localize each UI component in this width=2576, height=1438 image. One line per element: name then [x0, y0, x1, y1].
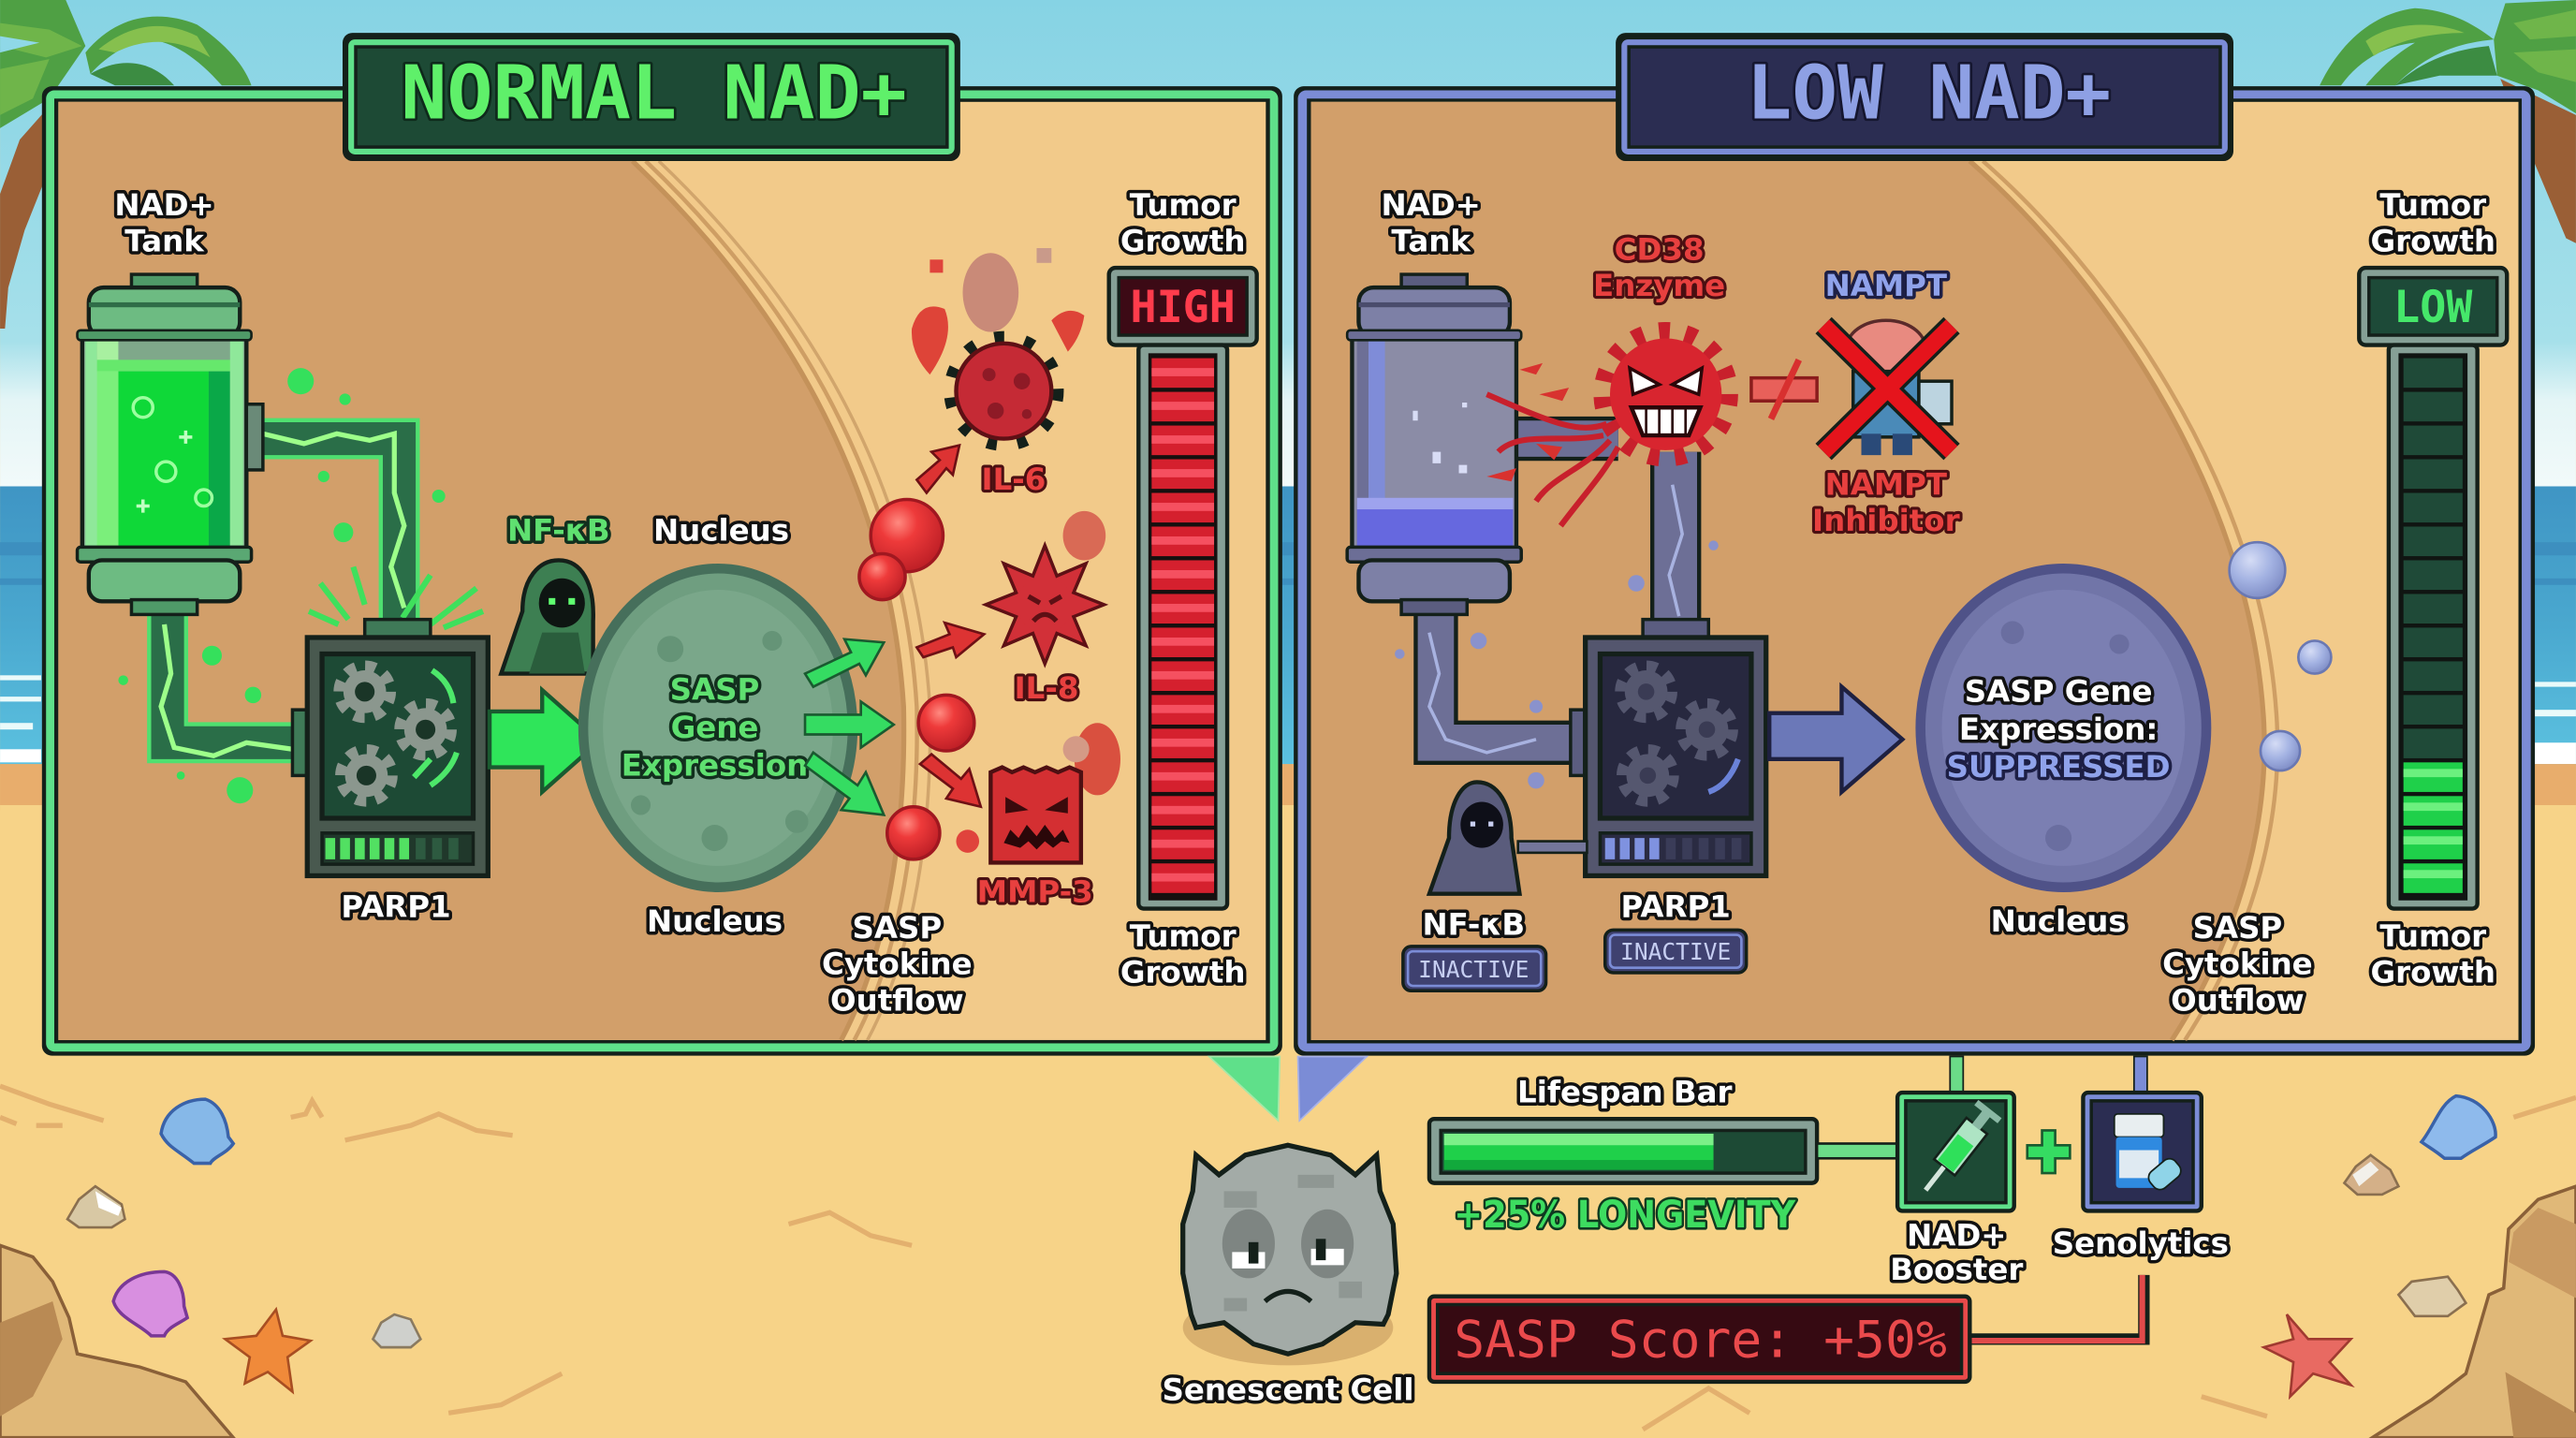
arrow: PARP1 to nucleus: [490, 690, 600, 792]
text: SASP gene expression: Gene: [671, 710, 758, 745]
arrow: to MMP-3: [920, 755, 981, 807]
arrow: to IL-6: [916, 446, 959, 493]
low badge: [2359, 268, 2507, 345]
label: NAMPT: NAMPT: [1825, 268, 1947, 303]
label: SASP cytokine outflow normal: Cytokine: [822, 946, 973, 982]
badge: NF-kB inactive: [1403, 946, 1546, 990]
text: SASP gene expression: Expression: [622, 747, 808, 783]
icon: NAD+ tank low: [1347, 274, 1521, 614]
text: SASP gene expression suppressed: SUPPRESSED: [1947, 749, 2171, 785]
pipes: depleted blue pipes: [1429, 439, 1682, 753]
label: NAD+ booster: NAD+: [1907, 1217, 2007, 1253]
text: SASP gene expression suppressed: Expression:: [1959, 712, 2158, 747]
heading: low NAD+: [1616, 33, 2233, 161]
label: CD38 enzyme: CD38: [1615, 231, 1705, 267]
heading: low NAD+: LOW NAD+: [1747, 50, 2111, 136]
connector: lifespan to booster: [1817, 1143, 1899, 1158]
label: SASP cytokine outflow low: Cytokine: [2162, 946, 2313, 982]
panel: normal NAD+: [42, 86, 1282, 1056]
label: nucleus top: Nucleus: [653, 512, 789, 548]
arrow: PARP1 to nucleus low: [1769, 687, 1902, 792]
label: SASP cytokine outflow low: SASP: [2193, 910, 2282, 946]
heading: normal NAD+: [343, 33, 960, 161]
icon: not equal sign: [1751, 360, 1817, 419]
label: SASP cytokine outflow low: Outflow: [2171, 982, 2305, 1018]
label: tumor growth top low: Tumor: [2379, 187, 2486, 223]
icon: MMP-3 monster: [990, 768, 1081, 862]
smoke: cytokine puffs: [912, 248, 1120, 853]
pointer: low panel tail: [1298, 1056, 1367, 1121]
icon: plus sign: [2027, 1130, 2070, 1173]
label: nucleus bottom: Nucleus: [647, 903, 783, 939]
label: NAD+ tank normal: NAD+: [114, 187, 214, 223]
text: SASP gene expression: SASP: [670, 672, 759, 708]
palm tree left: [0, 0, 252, 329]
tumor growth bar low: [2389, 345, 2478, 909]
icon: CD38 virus with tentacles: [1486, 332, 1728, 526]
label: tumor growth bottom low: Growth: [2370, 955, 2496, 990]
palm tree right: [2320, 0, 2576, 243]
label: tumor growth bottom normal: Growth: [1120, 955, 1245, 990]
icon: IL-8 spiked cell: [986, 546, 1104, 664]
label: tumor growth bottom low: Tumor: [2379, 918, 2486, 954]
badge: PARP1 inactive: INACTIVE: [1620, 938, 1731, 965]
lifespan bar: [1429, 1119, 1817, 1183]
icon: senolytics pill bottle: [2083, 1093, 2202, 1211]
tumor growth bar high: [1138, 345, 1227, 909]
low badge: LOW: [2393, 282, 2473, 333]
label: NAD+ tank normal: Tank: [124, 224, 205, 259]
nucleus: low: [1921, 568, 2206, 888]
pipes: green energised pipes: [161, 433, 404, 756]
label: tumor growth top low: Growth: [2370, 224, 2496, 259]
connector: senolytics to panel: [2134, 1056, 2147, 1094]
icon: PARP1 machine inactive: [1571, 620, 1766, 875]
text: longevity gain: +25% LONGEVITY: [1454, 1193, 1796, 1237]
icon: PARP1 machine active: [292, 620, 488, 875]
label: senolytics: Senolytics: [2053, 1225, 2229, 1261]
label: nucleus low: Nucleus: [1991, 903, 2127, 939]
label: NF-kB low: NF-κB: [1423, 907, 1525, 943]
label: PARP1 normal: PARP1: [341, 888, 451, 924]
heading: normal NAD+: NORMAL NAD+: [401, 50, 907, 136]
label: NAD+ booster: Booster: [1890, 1252, 2023, 1287]
label: senescent cell: Senescent Cell: [1162, 1372, 1414, 1407]
label: SASP cytokine outflow normal: SASP: [852, 910, 942, 946]
arrows: SASP outflow: [805, 639, 894, 814]
droplets: blue leaks: [1395, 540, 1719, 788]
label: MMP-3: MMP-3: [977, 874, 1093, 910]
SASP score box: [1429, 1297, 1969, 1382]
pointer: normal panel tail: [1209, 1056, 1280, 1121]
icon: NAD+ booster syringe: [1897, 1093, 2014, 1211]
SASP score box: SASP Score: +50%: [1454, 1311, 1947, 1370]
label: NAMPT inhibitor: Inhibitor: [1812, 503, 1960, 538]
label: PARP1 low: PARP1: [1621, 888, 1731, 924]
connector: booster to panel: [1950, 1056, 1963, 1094]
badge: NF-kB inactive: INACTIVE: [1418, 956, 1529, 983]
label: IL-6: IL-6: [982, 462, 1046, 497]
cytokine spheres: [859, 500, 974, 859]
icon: IL-6 virus: [949, 337, 1058, 446]
label: SASP cytokine outflow normal: Outflow: [830, 982, 964, 1018]
label: NAD+ tank low: NAD+: [1381, 187, 1481, 223]
badge: PARP1 inactive: [1605, 930, 1747, 973]
label: lifespan bar: Lifespan Bar: [1517, 1075, 1732, 1110]
label: IL-8: IL-8: [1015, 670, 1078, 706]
connector: SASP score to senolytics: [1969, 1275, 2144, 1339]
label: NF-kB active: NF-κB: [507, 512, 610, 548]
icon: NAMPT figure crossed out: [1823, 320, 1952, 455]
icon: senescent cell: [1183, 1145, 1397, 1365]
text: SASP gene expression suppressed: SASP Gene: [1965, 673, 2152, 709]
panel: low NAD+: [1294, 86, 2535, 1056]
icon: NAD+ tank full: [78, 274, 263, 614]
high badge: [1109, 268, 1257, 345]
droplets: green sparks: [118, 368, 483, 803]
label: NAD+ tank low: Tank: [1391, 224, 1471, 259]
icon: NF-kB hooded figure inactive: [1429, 782, 1587, 894]
nucleus: normal: [583, 568, 853, 888]
arrow: to IL-8: [916, 623, 984, 657]
icon: NF-kB hooded figure: [501, 560, 593, 674]
label: NAMPT inhibitor: NAMPT: [1825, 466, 1947, 502]
label: CD38 enzyme: Enzyme: [1593, 268, 1725, 303]
label: tumor growth top normal: Growth: [1120, 224, 1245, 259]
bubbles: suppressed cytokines: [2230, 542, 2331, 770]
decor: shells, rocks, starfish and sand: [0, 1086, 2576, 1438]
high badge: HIGH: [1131, 282, 1236, 333]
label: tumor growth bottom normal: Tumor: [1130, 918, 1237, 954]
label: tumor growth top normal: Tumor: [1130, 187, 1237, 223]
